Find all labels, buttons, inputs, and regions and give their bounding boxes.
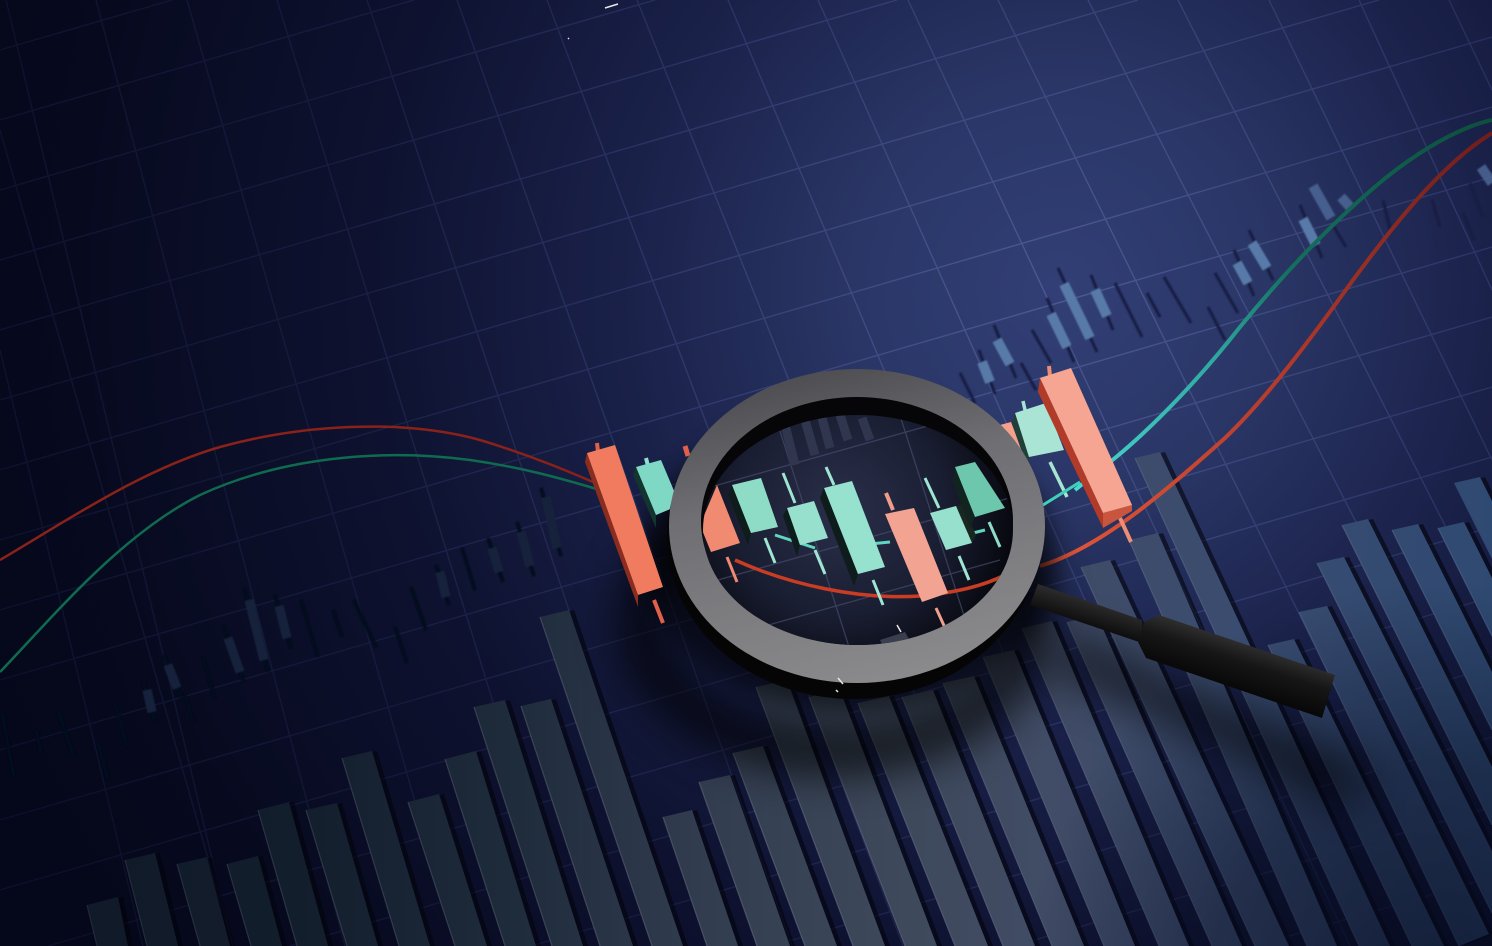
candlestick: small salmon behind ring, right [1000, 422, 1030, 475]
lens candle: orange [700, 485, 740, 582]
lower right darkening [1000, 560, 1492, 946]
lens contents [703, 415, 1013, 645]
moving average curves: left section [0, 427, 600, 672]
magnifier shadow [640, 490, 1360, 790]
magnifying glass [568, 4, 1335, 718]
lens candle: teal 5 [952, 462, 1005, 547]
handle neck [1030, 584, 1142, 643]
lens teal curve [775, 530, 985, 548]
background candlesticks: left dark series [2, 488, 561, 780]
lens background [700, 410, 1020, 650]
background candlesticks: right blue series [960, 167, 1492, 403]
lens grid lines [714, 420, 1008, 645]
candlestick: large salmon right [1038, 366, 1132, 542]
lens candle: teal 2 [783, 473, 828, 574]
dark halo behind candles [645, 410, 1055, 710]
candlestick: small orange behind ring, left [685, 446, 688, 456]
ring grey rim [669, 369, 1045, 683]
lens candle: teal 1 [728, 478, 778, 563]
lens candle: teal 4 [925, 478, 976, 580]
handle grip [1138, 615, 1335, 718]
lens bar fragment [880, 632, 908, 644]
moving average curves: right section [1040, 120, 1492, 566]
teal curve segment between candles [1043, 482, 1080, 505]
lens candle: teal 3 [820, 467, 885, 605]
ring inner wall [701, 397, 1013, 645]
candlestick: teal right [1012, 401, 1067, 497]
candlestick: large orange left [585, 443, 663, 623]
bar shadows [92, 452, 1492, 946]
ring black base [667, 375, 1039, 699]
lens dark background candles [785, 415, 870, 465]
glass specks [568, 4, 901, 692]
candlestick: teal left [633, 458, 680, 528]
lens candle: salmon [885, 493, 948, 630]
lens red curve [735, 560, 1005, 597]
bar chart: volume bars [87, 452, 1492, 946]
